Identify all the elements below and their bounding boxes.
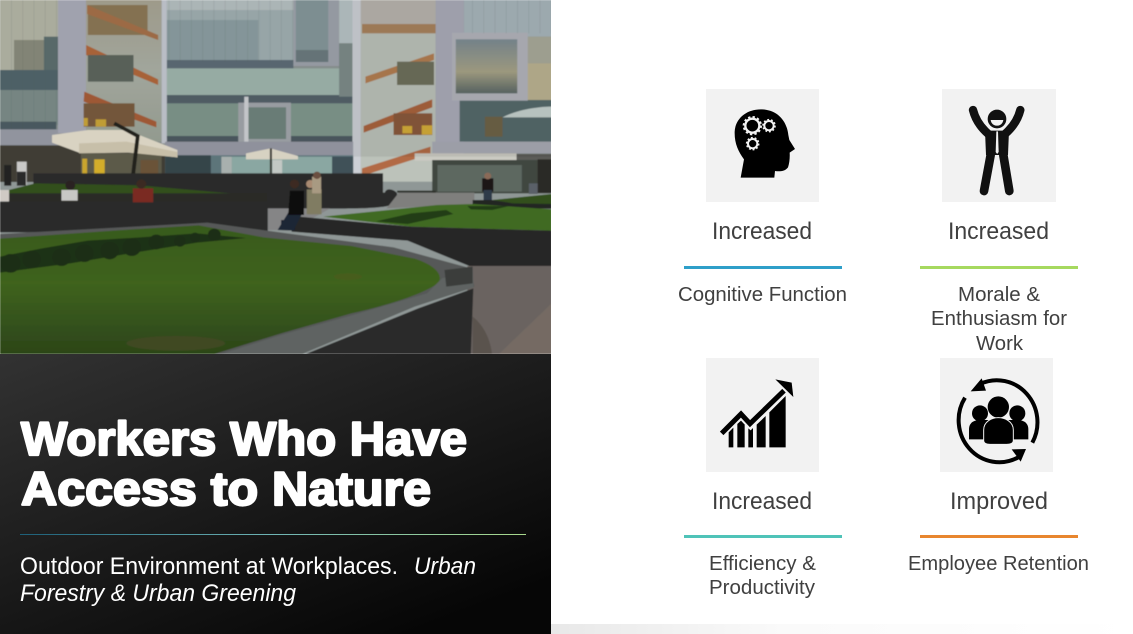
subtitle: Urban: [414, 553, 476, 580]
title: [21, 412, 467, 515]
rim: [0, 223, 474, 354]
panel: cognitive function: [678, 89, 847, 306]
pavement bottom right: [467, 266, 552, 354]
label: employee retention: Employee Retention: [908, 552, 1089, 575]
label: morale and enthusiasm for work: Morale &: [958, 283, 1040, 306]
subtitle: Outdoor Environment at Workplaces.: [20, 553, 398, 580]
title: Access to Nature: [21, 462, 431, 515]
label: efficiency and productivity: Efficiency &: [709, 552, 816, 575]
people: [281, 220, 295, 230]
glossy curb and dark wall: [226, 278, 473, 354]
overall darkening of the facade: [0, 0, 552, 157]
front wall left: [0, 202, 268, 232]
central glass: [167, 10, 294, 60]
pavement: [387, 193, 474, 208]
heading: increased: Increased: [948, 218, 1049, 245]
heading: improved: Improved: [950, 488, 1048, 515]
left glass: [0, 0, 58, 72]
icon: person with raised arms: [973, 110, 1020, 191]
label: efficiency and productivity: [709, 552, 816, 599]
lower window box: [238, 103, 291, 144]
floor bands: [0, 129, 58, 146]
photo: office courtyard with lawn: [0, 0, 552, 354]
pillar: [58, 0, 86, 133]
panel: title block: [0, 354, 551, 634]
left umbrella and lamp: [52, 130, 177, 157]
hedge: [0, 233, 246, 273]
icon: rising bar chart with arrow: [722, 379, 793, 447]
projecting glass box: [293, 0, 339, 66]
bottom gradient strip: [551, 624, 1133, 634]
panel: efficiency: [684, 358, 842, 599]
subtitle: [20, 553, 476, 607]
subtitle: Forestry & Urban Greening: [20, 580, 297, 607]
label: efficiency and productivity: Productivity: [709, 576, 816, 599]
right wall: [436, 0, 464, 155]
right stair glass: [360, 24, 436, 182]
right front wall: [292, 216, 552, 267]
label: morale and enthusiasm for work: Work: [976, 332, 1024, 355]
panel: morale: [920, 89, 1078, 355]
right mullion: [352, 0, 361, 182]
left stair glass: [86, 0, 162, 142]
label: morale and enthusiasm for work: [931, 283, 1067, 355]
front lawn: [0, 225, 440, 354]
ground floor: [0, 145, 165, 182]
dry patches: [127, 336, 225, 351]
right upper lawn: [473, 200, 552, 209]
label: morale and enthusiasm for work: Enthusiasm for: [931, 307, 1067, 330]
label: cognitive function: Cognitive Function: [678, 283, 847, 306]
panel: employee retention: [908, 358, 1089, 575]
icon: people in circular arrows: [959, 378, 1037, 462]
heading: increased: Increased: [712, 218, 812, 245]
heading: increased: Increased: [712, 488, 812, 515]
icon: head with gears: [735, 109, 795, 178]
title: Workers Who Have: [21, 412, 467, 465]
back planter: [33, 173, 383, 195]
